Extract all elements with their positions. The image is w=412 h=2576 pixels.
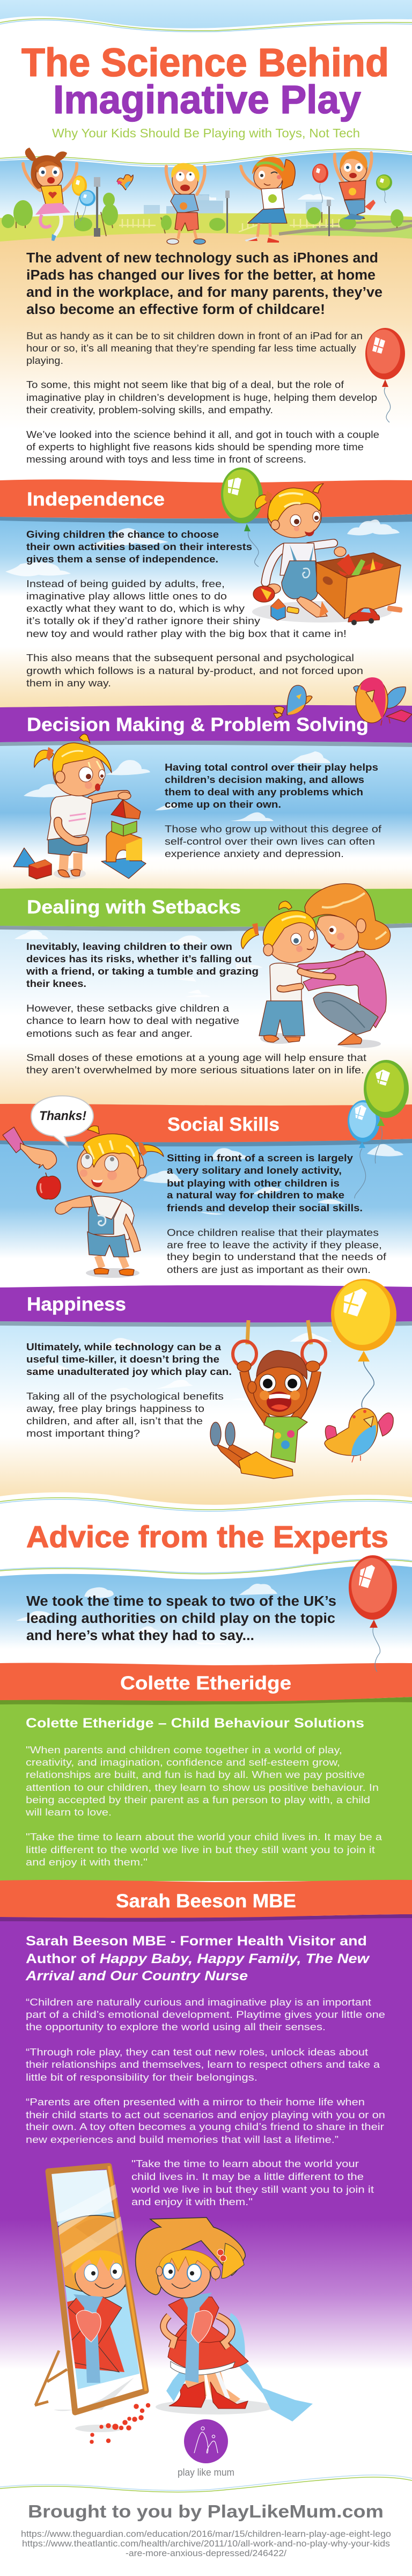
intro body text: hour or so, it’s all meaning that they’re spending far less time actually: [26, 342, 357, 354]
illustration: hand with apple: [3, 1127, 61, 1199]
text: sarah quotes: “Through role play, they can test out new roles, unlock ideas about: [26, 2046, 368, 2058]
heading: Happiness: [27, 1294, 126, 1315]
text: social: [167, 1152, 387, 1275]
text: colette quotes: creativity, and imagination, confidence and self-esteem grow,: [26, 1757, 340, 1768]
text: decision: [165, 762, 382, 859]
text: experts intro: [26, 1594, 336, 1643]
icon: bird under balloon: [325, 1408, 393, 1462]
text: colette quotes: will learn to love.: [25, 1806, 112, 1818]
intro body text: imaginative play in children’s development is huge, helping them develop: [26, 392, 377, 403]
text: happiness: [26, 1341, 232, 1439]
icons: two birds on band: [274, 677, 412, 726]
text: decision: experience anxiety and depression.: [165, 848, 344, 859]
text: independence: Giving children the chance to choose: [26, 529, 219, 540]
text: social: but playing with other children is: [167, 1177, 340, 1189]
illustration: mirror with reflected girl: [35, 2166, 150, 2412]
text: happiness: children, and after all, isn’t that the: [26, 1415, 203, 1426]
text: sarah quotes: “Children are naturally curious and imaginative play is an important: [26, 1996, 371, 2008]
text: sarah quotes: and enjoy it with them.": [131, 2196, 253, 2207]
intro body text: [26, 330, 379, 465]
text: sarah quotes: the opportunity to explore the world using all their senses.: [26, 2021, 326, 2032]
text: social: a very solitary and lonely activity,: [167, 1165, 342, 1176]
text: colette quotes: Colette Etheridge – Child Behaviour Solutions: [26, 1716, 364, 1731]
text: independence: gives them a sense of independence.: [26, 553, 218, 565]
text: colette quotes: relationships are built, and fun is had by all. When we pay positive: [26, 1769, 365, 1780]
text: colette quotes: [25, 1716, 382, 1868]
illustration: blond boy jumping: [166, 163, 205, 244]
intro body text: But as handy as it can be to sit children down in front of an iPad for an: [26, 330, 363, 341]
text: colette quotes: attention to our children, they learn to show us positive behaviour. In: [26, 1782, 379, 1793]
illustration: mother comforting girl: [241, 883, 391, 1048]
text: setbacks: However, these setbacks give children a: [26, 1002, 230, 1014]
text: happiness: Taking all of the psychological benefits: [26, 1391, 224, 1402]
divider wave into experts section: [0, 1492, 412, 1572]
panel: dealing with setbacks: [0, 888, 412, 931]
text: sarah quotes: their relationships and themselves, learn to respect others and take a: [26, 2059, 380, 2070]
text: independence: [26, 529, 363, 689]
panel: independence: [0, 479, 412, 523]
text: sarah quotes: Arrival and Our Country Nurse: [25, 1968, 248, 1984]
icon: green balloon: [219, 466, 265, 567]
footer source links: https://www.theatlantic.com/health/archive/2011/10/all-work-and-no-play-why-your-kids: [22, 2538, 390, 2549]
footer source links: https://www.theguardian.com/education/2016/mar/15/children-learn-play-age-eight-lego: [21, 2529, 391, 2539]
illustration: girl with apple: [55, 1126, 164, 1278]
text: setbacks: Small doses of these emotions at a young age will help ensure that: [26, 1052, 366, 1063]
text: social: a natural way for children to make: [167, 1189, 344, 1201]
text: decision: come up on their own.: [165, 799, 281, 810]
logo: play like mum: play like mum: [178, 2467, 234, 2478]
illustration: small bird in scene: [117, 175, 133, 190]
text: social: they begin to understand that the needs of: [167, 1251, 387, 1262]
illustration: girl stacking blocks: [13, 734, 146, 879]
text: setbacks: devices has its risks, whether it’s falling out: [26, 953, 252, 964]
intro bold text: and in the workplace, and for many parents, they’ve: [26, 285, 382, 300]
text: sarah quotes: little bit of responsibility for their belongings.: [26, 2072, 258, 2083]
panel: experts intro: [0, 1559, 412, 1669]
text: independence: their own activities based on their interests: [26, 541, 252, 552]
intro bold text: iPads has changed our lives for the better, at home: [26, 268, 376, 283]
text: social: friends and develop their social skills.: [167, 1202, 363, 1213]
callout: thanks speech bubble: Thanks!: [39, 1109, 86, 1123]
intro bold text: The advent of new technology such as iPhones and: [26, 251, 378, 266]
icon: red balloon: [365, 328, 405, 422]
text: sarah quotes: Sarah Beeson MBE - Former Health Visitor and: [26, 1934, 367, 1949]
text: happiness: most important thing?: [26, 1428, 140, 1439]
title: The Science Behind: [21, 40, 389, 85]
title: [21, 40, 389, 122]
text: happiness: Ultimately, while technology can be a: [26, 1341, 222, 1352]
logo: play like mum: [178, 2419, 234, 2478]
text: independence: This also means that the subsequent personal and psychological: [26, 652, 354, 663]
panel: happiness: [0, 1285, 412, 1327]
text: sarah quotes: world we live in but they still want you to join it: [131, 2184, 374, 2195]
intro bold text: also become an effective form of childcare!: [26, 302, 325, 317]
park scene: [0, 149, 412, 241]
illustration: girl with toy box: [252, 484, 403, 625]
intro body text: of experts to highlight five reasons kids should be spending more time: [26, 441, 364, 452]
footer credit: Brought to you by PlayLikeMum.com: [28, 2502, 384, 2522]
text: sarah quotes: [25, 1934, 385, 2207]
text: sarah quotes: their child starts to act out scenarios and enjoy playing with you or on: [26, 2109, 385, 2120]
text: independence: imaginative play allows little ones to do: [26, 590, 227, 602]
text: happiness: same unadulterated joy which play can.: [26, 1366, 232, 1377]
text: independence: Instead of being guided by adults, free,: [26, 578, 225, 589]
clouds: setbacks: [14, 931, 263, 997]
icon: red balloon experts: [349, 1555, 397, 1672]
text: social: others are just as important as their own.: [167, 1264, 371, 1275]
text: decision: Those who grow up without this degree of: [165, 823, 382, 835]
text: independence: them in any way.: [26, 677, 111, 689]
text: colette quotes: and enjoy it with them.": [26, 1856, 148, 1868]
balloons in scene: [72, 164, 392, 228]
illustration: girl with pigtails jumping: [23, 148, 77, 241]
panel: social skills: [0, 1104, 412, 1146]
text: social: are free to leave the activity if they please,: [167, 1239, 382, 1250]
intro body text: messing around with toys and less time in front of screens.: [26, 453, 306, 465]
text: setbacks: their knees.: [26, 978, 86, 989]
heading: Independence: [27, 489, 165, 510]
footer source links: [21, 2529, 391, 2558]
illustration: girl in hat and dress-up: [136, 2218, 313, 2421]
text: setbacks: [26, 941, 366, 1075]
text: happiness: away, free play brings happiness to: [26, 1403, 204, 1414]
intro body text: To some, this might not seem like that big of a deal, but the role of: [26, 379, 344, 390]
text: independence: it’s totally ok if they’d rather ignore their shiny: [26, 615, 261, 626]
heading: Decision Making & Problem Solving: [27, 714, 369, 735]
header sky wave: [0, 0, 412, 32]
text: colette quotes: "Take the time to learn about the world your child lives in. It may be a: [26, 1831, 382, 1842]
text: setbacks: chance to learn how to deal with negative: [26, 1015, 239, 1026]
text: experts intro: We took the time to speak to two of the UK’s: [26, 1594, 336, 1609]
heading: Social Skills: [167, 1114, 279, 1135]
text: setbacks: Inevitably, leaving children to their own: [26, 941, 232, 952]
intro body text: playing.: [26, 355, 63, 366]
callout: thanks speech bubble: [31, 1096, 93, 1147]
text: sarah quotes: Author of Happy Baby, Happy Family, The New: [26, 1951, 370, 1966]
text: independence: exactly what they want to do, which is why: [26, 603, 245, 614]
text: sarah quotes: new experiences and build memories that will last a lifetime.”: [26, 2134, 339, 2145]
panel: decision making: [0, 705, 412, 747]
clouds: happiness: [27, 1333, 332, 1401]
text: decision: Having total control over their play helps: [165, 762, 378, 773]
panel: sarah heading band: [0, 1880, 412, 1922]
text: sarah quotes: "Take the time to learn about the world your: [131, 2158, 359, 2169]
text: sarah quotes: child lives in. It may be a little different to the: [131, 2171, 364, 2182]
text: colette quotes: little different to the world we live in but they still want you to join it: [26, 1844, 375, 1855]
text: decision: them to deal with any problems which: [165, 786, 363, 797]
text: sarah quotes: part of a child’s emotional development. Playtime gives your little one: [26, 2009, 385, 2020]
text: independence: growth which follows is a natural by-product, and not forced upon: [26, 665, 363, 676]
heading: Colette Etheridge: [120, 1673, 291, 1694]
clouds: social: [143, 1144, 403, 1214]
clouds: decision: [24, 751, 331, 821]
icon: blue and green balloons: [348, 1060, 409, 1198]
text: independence: new toy and would rather play with the big box that it came in!: [26, 628, 347, 639]
clouds: independence: [5, 519, 400, 576]
text: setbacks: with a friend, or taking a tumble and grazing: [26, 965, 259, 977]
intro body text: We’ve looked into the science behind it all, and got in touch with a couple: [26, 429, 379, 440]
text: social: Sitting in front of a screen is largely: [167, 1152, 354, 1163]
text: experts intro: and here’s what they had to say...: [26, 1628, 254, 1643]
illustration: girl with ponytail: [241, 157, 295, 243]
illustration: boy on gym rings: [210, 1320, 326, 1479]
intro body text: their creativity, problem-solving skills, and empathy.: [26, 404, 273, 415]
text: sarah quotes: “Parents are often presented with a mirror to their home life when: [26, 2096, 365, 2107]
icon: yellow balloon: [331, 1279, 396, 1408]
divider wave footer: [0, 2475, 412, 2492]
intro bold text: [26, 251, 382, 317]
text: setbacks: emotions such as fear and anger.: [26, 1028, 193, 1039]
heading: Sarah Beeson MBE: [116, 1891, 296, 1912]
text: experts intro: leading authorities on child play on the topic: [26, 1611, 335, 1626]
panel: colette heading band: [0, 1663, 412, 1705]
title: Imaginative Play: [53, 77, 361, 122]
heading: Dealing with Setbacks: [27, 897, 241, 918]
text: colette quotes: being accepted by their parent as a fun person to play with, a child: [26, 1794, 370, 1805]
text: decision: children’s decision making, and allows: [165, 774, 364, 785]
heading: advice from the experts: Advice from the Experts: [26, 1520, 388, 1554]
subtitle: Why Your Kids Should Be Playing with Toys, Not Tech: [52, 126, 360, 140]
text: colette quotes: "When parents and children come together in a world of play,: [26, 1744, 342, 1755]
illustration: scattered red beads: [75, 2403, 150, 2444]
text: happiness: useful time-killer, it doesn’t bring the: [26, 1353, 219, 1365]
text: setbacks: they aren’t overwhelmed by more serious situations later on in life.: [26, 1064, 364, 1075]
text: decision: self-control over their own lives can often: [165, 836, 375, 847]
text: sarah quotes: their own. A toy often becomes a young child’s friend to share in their: [26, 2121, 384, 2132]
text: social: Once children realise that their playmates: [167, 1227, 379, 1238]
illustration: boy jumping in orange shirt: [335, 151, 376, 220]
footer source links: -are-more-anxious-depressed/246422/: [126, 2548, 286, 2558]
